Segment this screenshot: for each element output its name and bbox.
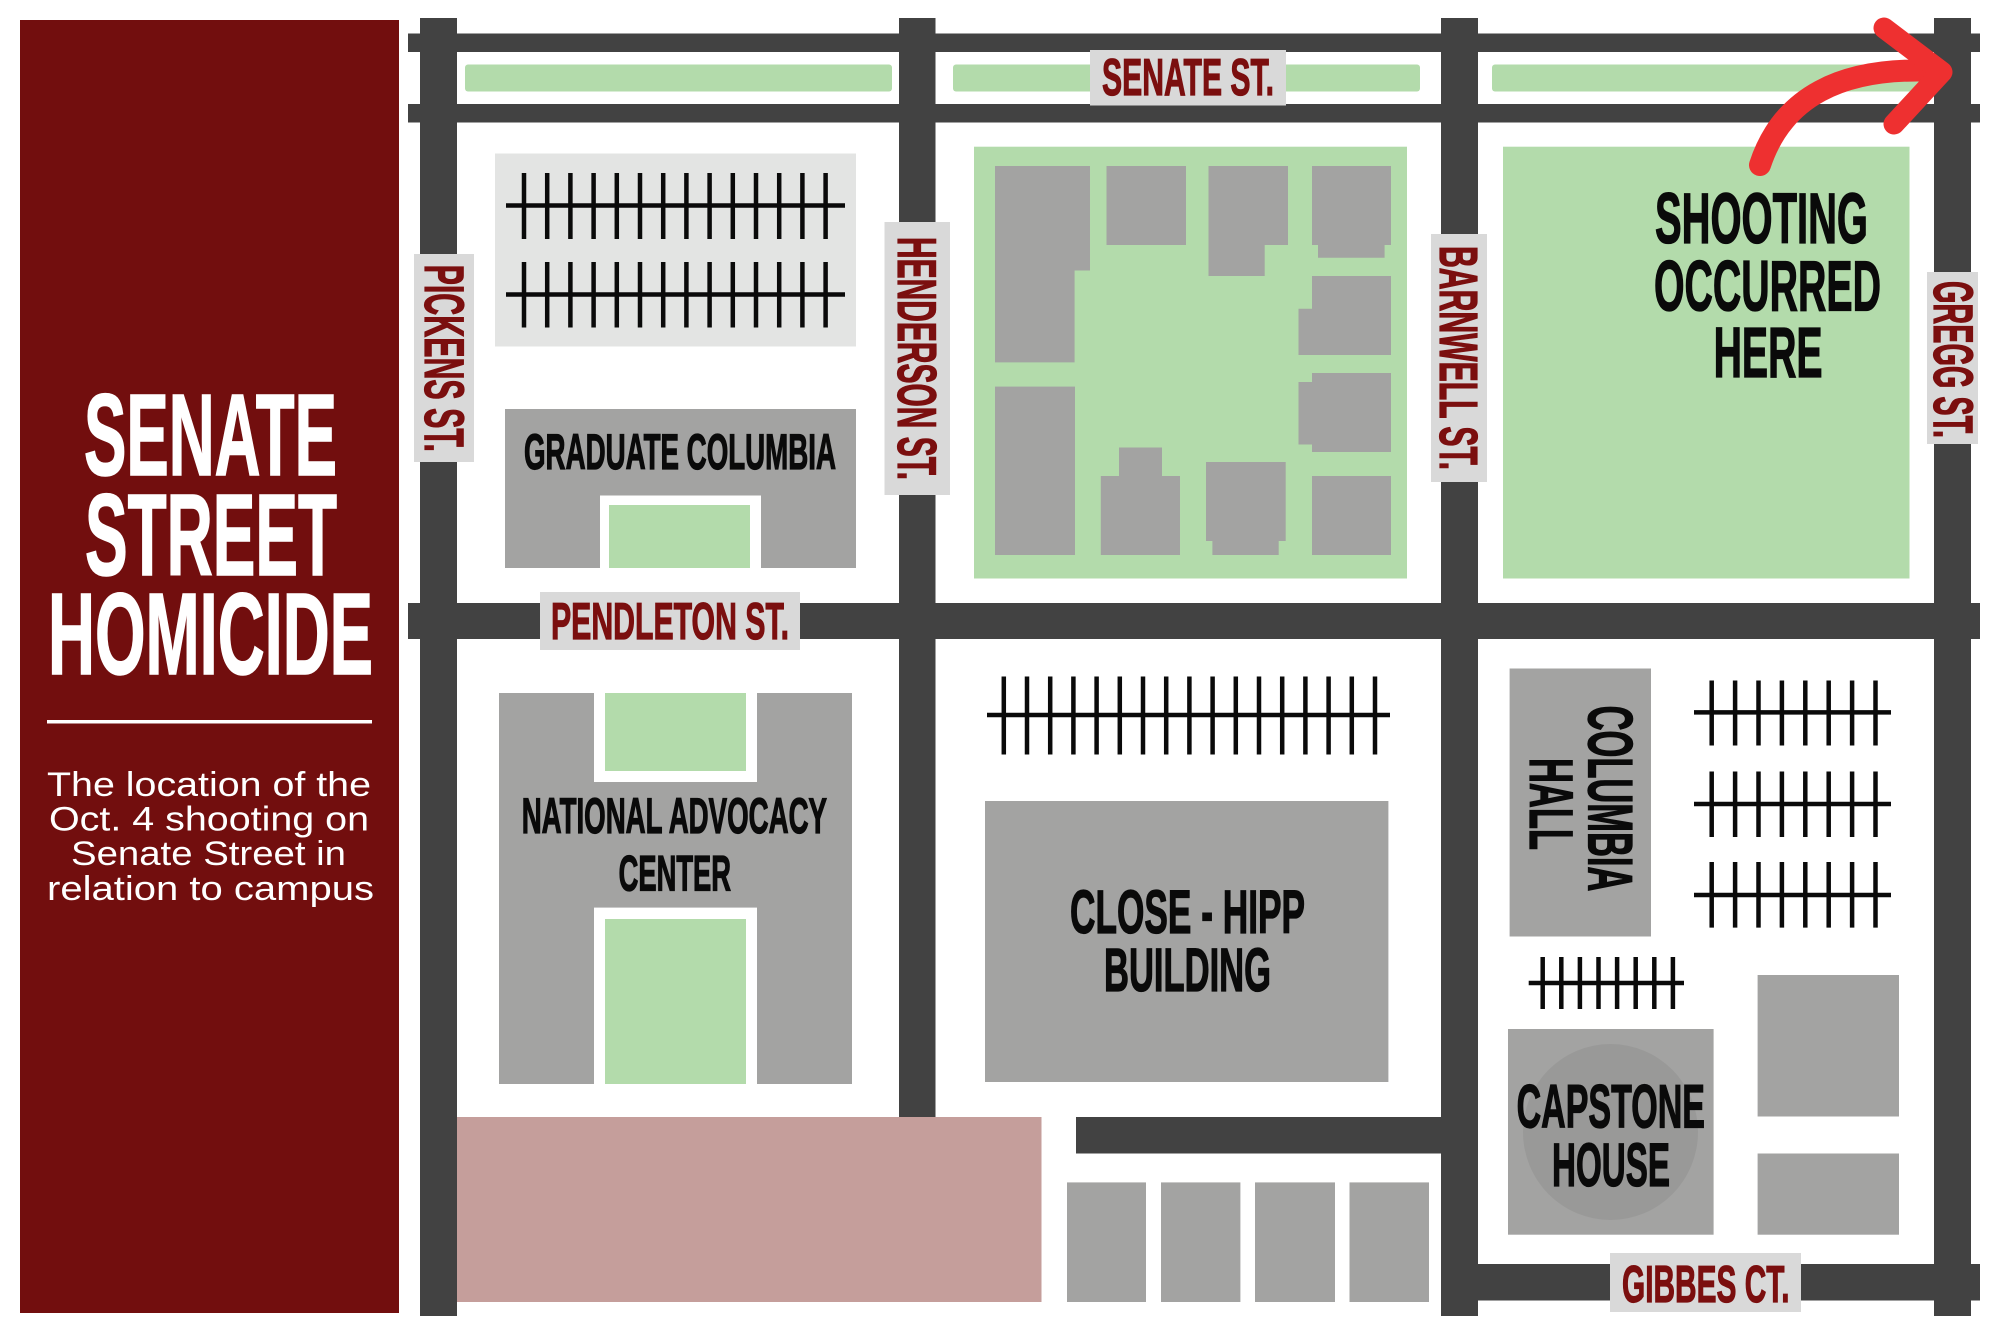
parking lot: center bbox=[987, 676, 1390, 754]
street label: Barnwell St.: BARNWELL ST. bbox=[1428, 246, 1488, 470]
building: Capstone House bbox=[1508, 1029, 1714, 1235]
street label: Senate St.: SENATE ST. bbox=[1102, 49, 1274, 107]
row of small buildings bbox=[1067, 1182, 1429, 1302]
parking rows: right bbox=[1694, 680, 1891, 928]
title bbox=[48, 370, 373, 699]
building: National Advocacy Center bbox=[499, 693, 852, 1084]
description text: Oct. 4 shooting on bbox=[49, 800, 369, 838]
description text bbox=[47, 766, 374, 908]
callout: shooting occurred here bbox=[1654, 180, 1881, 393]
building: Graduate Columbia bbox=[505, 409, 856, 568]
street label: Gibbes Ct.: GIBBES CT. bbox=[1622, 1256, 1790, 1314]
parking row: small bbox=[1529, 957, 1684, 1009]
callout: shooting occurred here: HERE bbox=[1714, 314, 1823, 393]
green median strips on Senate St. bbox=[465, 64, 1919, 92]
green block: central quad with buildings bbox=[974, 147, 1407, 578]
street label: Henderson St. bbox=[884, 222, 950, 495]
street label: Pickens St.: PICKENS ST. bbox=[413, 265, 476, 452]
road network bbox=[408, 18, 1980, 1316]
building: Close-Hipp: CLOSE - HIPP bbox=[1070, 878, 1305, 946]
description text: The location of the bbox=[47, 766, 371, 804]
unnamed buildings: right bbox=[1758, 975, 1899, 1235]
building: Capstone House: HOUSE bbox=[1552, 1131, 1670, 1199]
street label: Gibbes Ct. bbox=[1610, 1253, 1801, 1314]
street label: Senate St. bbox=[1090, 49, 1286, 107]
parking lot: top left bbox=[495, 154, 856, 346]
building: Capstone House: CAPSTONE bbox=[1517, 1072, 1705, 1140]
title: HOMICIDE bbox=[48, 569, 373, 699]
description text: relation to campus bbox=[47, 870, 374, 908]
building: Close-Hipp bbox=[985, 801, 1388, 1082]
street label: Gregg St.: GREGG ST. bbox=[1922, 281, 1985, 438]
description text: Senate Street in bbox=[71, 835, 346, 873]
title: SENATE bbox=[84, 370, 337, 500]
panel: title sidebar bbox=[20, 20, 399, 1313]
building: Columbia Hall: HALL bbox=[1517, 758, 1585, 850]
arrow: red curved arrow to shooting site bbox=[1760, 28, 1942, 165]
title: STREET bbox=[85, 470, 337, 600]
building: Close-Hipp: BUILDING bbox=[1104, 936, 1271, 1004]
street label: Henderson St.: HENDERSON ST. bbox=[886, 237, 948, 480]
pink parking area bbox=[457, 1117, 1042, 1302]
street label: Barnwell St. bbox=[1428, 234, 1488, 482]
building: Graduate Columbia: GRADUATE COLUMBIA bbox=[524, 424, 836, 480]
building: National Advocacy Center: CENTER bbox=[619, 846, 731, 902]
street label: Pickens St. bbox=[413, 254, 476, 462]
street label: Pendleton St.: PENDLETON ST. bbox=[551, 593, 789, 651]
building: Columbia Hall bbox=[1510, 668, 1651, 936]
building: National Advocacy Center: NATIONAL ADVOCACY bbox=[522, 788, 827, 844]
street label: Gregg St. bbox=[1922, 272, 1985, 444]
street label: Pendleton St. bbox=[540, 592, 800, 651]
building: Columbia Hall: COLUMBIA bbox=[1574, 706, 1644, 891]
green block: shooting site bbox=[1503, 147, 1910, 578]
